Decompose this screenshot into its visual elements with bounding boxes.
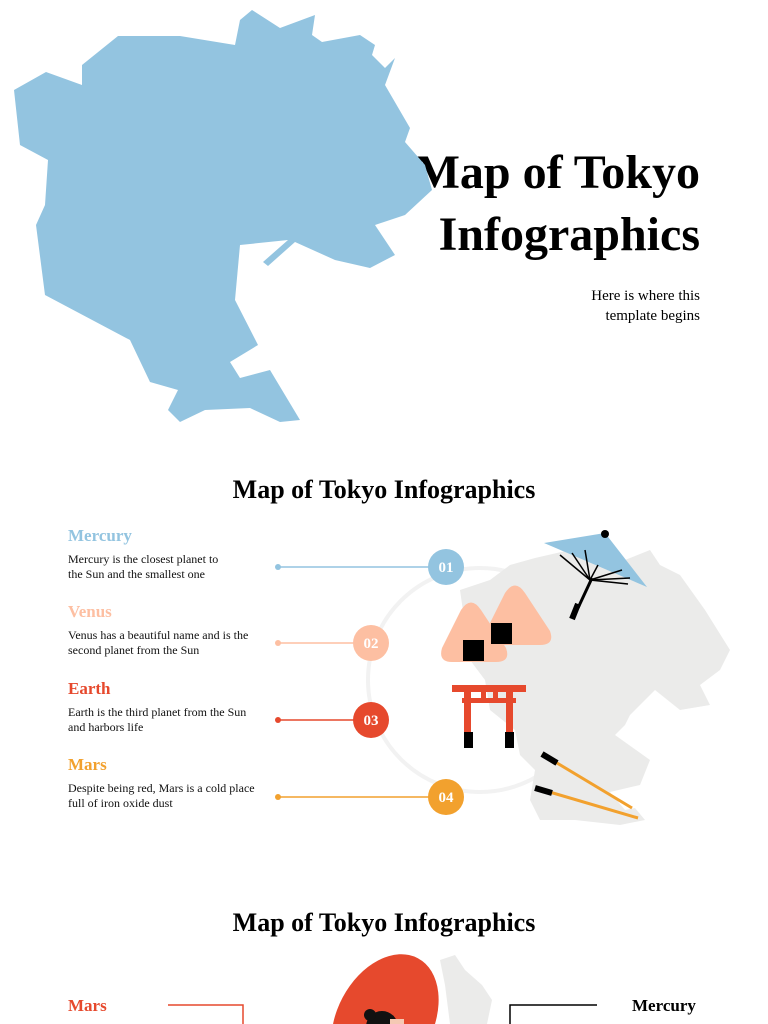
map: tokyo blue <box>14 10 432 422</box>
item 01 mercury <box>68 526 218 581</box>
section heading: Map of Tokyo Infographics <box>233 475 535 504</box>
subtitle: Here is where this <box>591 288 700 304</box>
section heading 3: Map of Tokyo Infographics <box>233 908 535 937</box>
item 01 mercury: the Sun and the smallest one <box>68 567 205 581</box>
item 02 venus <box>68 602 248 657</box>
item 03 earth: Earth is the third planet from the Sun <box>68 705 246 719</box>
item 02 venus: second planet from the Sun <box>68 643 199 657</box>
icon: umbrella <box>544 530 647 619</box>
item 04 mars: Despite being red, Mars is a cold place <box>68 781 255 795</box>
icon: onigiri <box>441 586 551 662</box>
bottom label mars: Mars <box>68 996 107 1015</box>
map: gray with icons <box>366 530 730 825</box>
item 03 earth: and harbors life <box>68 720 143 734</box>
connectors and number circles: 04 <box>438 790 454 806</box>
item 04 mars: full of iron oxide dust <box>68 796 173 810</box>
item 03 earth <box>68 679 246 734</box>
item 02 venus: Venus has a beautiful name and is the <box>68 628 248 642</box>
item 02 venus: Venus <box>68 602 112 621</box>
connectors and number circles: 02 <box>364 636 378 652</box>
title: Infographics <box>439 208 700 261</box>
item 01 mercury: Mercury is the closest planet to <box>68 552 218 566</box>
bottom label mercury: Mercury <box>632 996 696 1015</box>
item 03 earth: Earth <box>68 679 110 698</box>
icon: torii <box>452 685 526 736</box>
title: Map of Tokyo <box>415 146 700 199</box>
connectors and number circles: 01 <box>438 560 454 576</box>
subtitle <box>591 288 700 324</box>
icon: chopsticks <box>535 754 638 818</box>
subtitle: template begins <box>605 308 700 324</box>
item 04 mars <box>68 755 255 810</box>
title <box>415 146 700 261</box>
bottom illustration: map, umbrella, geisha <box>168 954 597 1024</box>
item 04 mars: Mars <box>68 755 107 774</box>
connectors and number circles: 03 <box>364 713 378 729</box>
item 01 mercury: Mercury <box>68 526 132 545</box>
connectors and number circles <box>275 549 464 815</box>
